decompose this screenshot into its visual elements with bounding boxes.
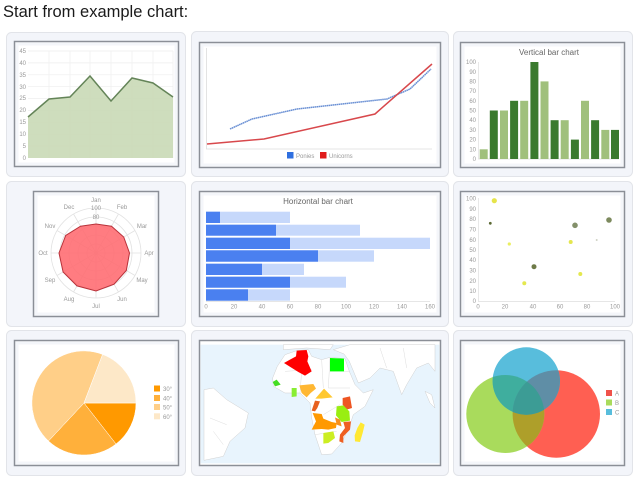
x axis labels [476, 304, 621, 310]
pie slices [32, 351, 136, 455]
month labels: May [136, 278, 148, 284]
y axis labels: 20 [469, 138, 477, 144]
y axis labels: 100 [466, 60, 477, 66]
scatter points [489, 198, 612, 285]
set B circle [466, 375, 544, 453]
x axis labels: 60 [287, 304, 294, 310]
overlap B and C [492, 375, 544, 415]
y axis labels: 0 [23, 156, 27, 162]
y axis labels: 15 [19, 120, 27, 126]
y axis labels: 40 [469, 118, 477, 124]
interior borders [210, 348, 407, 445]
y axis labels: 10 [469, 148, 477, 154]
legend: A [615, 392, 619, 398]
y axis labels: 50 [469, 108, 477, 114]
x axis labels: 80 [584, 304, 591, 310]
legend: Ponies [296, 154, 314, 160]
set A circle [513, 370, 600, 458]
x axis labels: 100 [341, 304, 352, 310]
y axis labels: 30 [469, 128, 477, 134]
legend: B [615, 401, 619, 407]
x axis labels: 140 [397, 304, 408, 310]
panel: geo map [192, 330, 448, 476]
legend [606, 390, 620, 416]
legend: C [615, 410, 620, 416]
y axis labels: 20 [19, 108, 27, 114]
y axis labels: 90 [469, 207, 477, 213]
y axis labels: 45 [19, 49, 27, 55]
legend [287, 152, 353, 160]
x axis labels: 40 [259, 304, 266, 310]
dark bars [206, 212, 318, 301]
x axis labels: 40 [530, 304, 537, 310]
green area series [28, 76, 173, 158]
panel: scatter chart [454, 182, 632, 326]
legend: Unicorns [329, 154, 353, 160]
legend: 30° [163, 387, 173, 393]
panel: line chart [192, 32, 448, 176]
overlap A and B [512, 410, 544, 446]
overlap A, B and C [512, 382, 544, 415]
radar polygon [59, 224, 130, 291]
x axis labels: 60 [557, 304, 564, 310]
legend: 50° [163, 406, 173, 412]
panel: vertical bar chart [454, 32, 632, 176]
y axis labels: 0 [473, 157, 477, 163]
legend: 40° [163, 396, 173, 402]
ponies line [230, 69, 431, 129]
y axis labels: 20 [469, 279, 477, 285]
x axis labels: 0 [476, 304, 480, 310]
y axis labels [19, 49, 27, 162]
y axis labels: 60 [469, 238, 477, 244]
y axis labels: 40 [469, 258, 477, 264]
month labels: Oct [38, 251, 48, 257]
map artwork [201, 345, 439, 463]
title: Start from example chart: [3, 3, 188, 21]
y axis labels: 80 [469, 80, 477, 86]
x axis labels [204, 304, 436, 310]
y axis labels: 40 [19, 61, 27, 67]
y axis labels: 60 [469, 99, 477, 105]
x axis labels: 100 [610, 304, 621, 310]
month labels: Aug [64, 297, 74, 303]
month labels: Dec [64, 205, 74, 211]
overlap A and C [512, 370, 560, 415]
set C circle [493, 347, 560, 415]
y axis labels [466, 60, 477, 163]
y axis labels: 70 [469, 89, 477, 95]
y axis labels: 50 [469, 248, 477, 254]
highlighted countries [273, 350, 365, 444]
y axis labels: 30 [19, 85, 27, 91]
month labels: Jun [117, 297, 127, 303]
panel: radar chart [6, 182, 186, 326]
month labels: 100 [91, 206, 102, 212]
y axis labels: 80 [469, 217, 477, 223]
y axis labels: 100 [466, 196, 477, 202]
area series line [28, 76, 173, 117]
x axis labels: 160 [425, 304, 436, 310]
landmasses [204, 345, 435, 460]
light bars [206, 212, 430, 301]
chart heading: Vertical bar chart [519, 48, 580, 57]
light bars [480, 81, 609, 159]
y axis labels: 35 [19, 73, 27, 79]
unicorns line [207, 64, 432, 144]
y axis labels: 10 [19, 132, 27, 138]
month labels: Feb [117, 205, 128, 211]
month labels: Apr [144, 251, 154, 257]
legend [154, 386, 173, 421]
y axis labels [466, 196, 477, 305]
month labels: 80 [93, 215, 100, 221]
y axis labels: 70 [469, 228, 477, 234]
y axis labels: 90 [469, 70, 477, 76]
y axis labels: 25 [19, 96, 27, 102]
x axis labels: 20 [502, 304, 509, 310]
x axis labels: 120 [369, 304, 380, 310]
y axis labels: 0 [473, 299, 477, 305]
month labels: Mar [137, 224, 147, 230]
month labels: Jan [91, 198, 101, 204]
month labels [38, 198, 154, 310]
x axis labels: 20 [231, 304, 238, 310]
chart heading: Horizontal bar chart [283, 197, 354, 206]
month labels: Nov [45, 224, 55, 230]
dark bars [490, 62, 619, 159]
x axis labels: 0 [204, 304, 208, 310]
month labels: Jul [92, 304, 100, 310]
y axis labels: 10 [469, 289, 477, 295]
panel: venn diagram [454, 330, 632, 476]
y axis labels: 5 [23, 144, 27, 150]
y axis labels: 30 [469, 268, 477, 274]
legend: 60° [163, 415, 173, 421]
x axis labels: 80 [315, 304, 322, 310]
panel: pie chart [6, 330, 186, 476]
month labels: Sep [45, 278, 56, 284]
panel: area chart [6, 32, 186, 176]
panel: horizontal bar chart [192, 182, 448, 326]
